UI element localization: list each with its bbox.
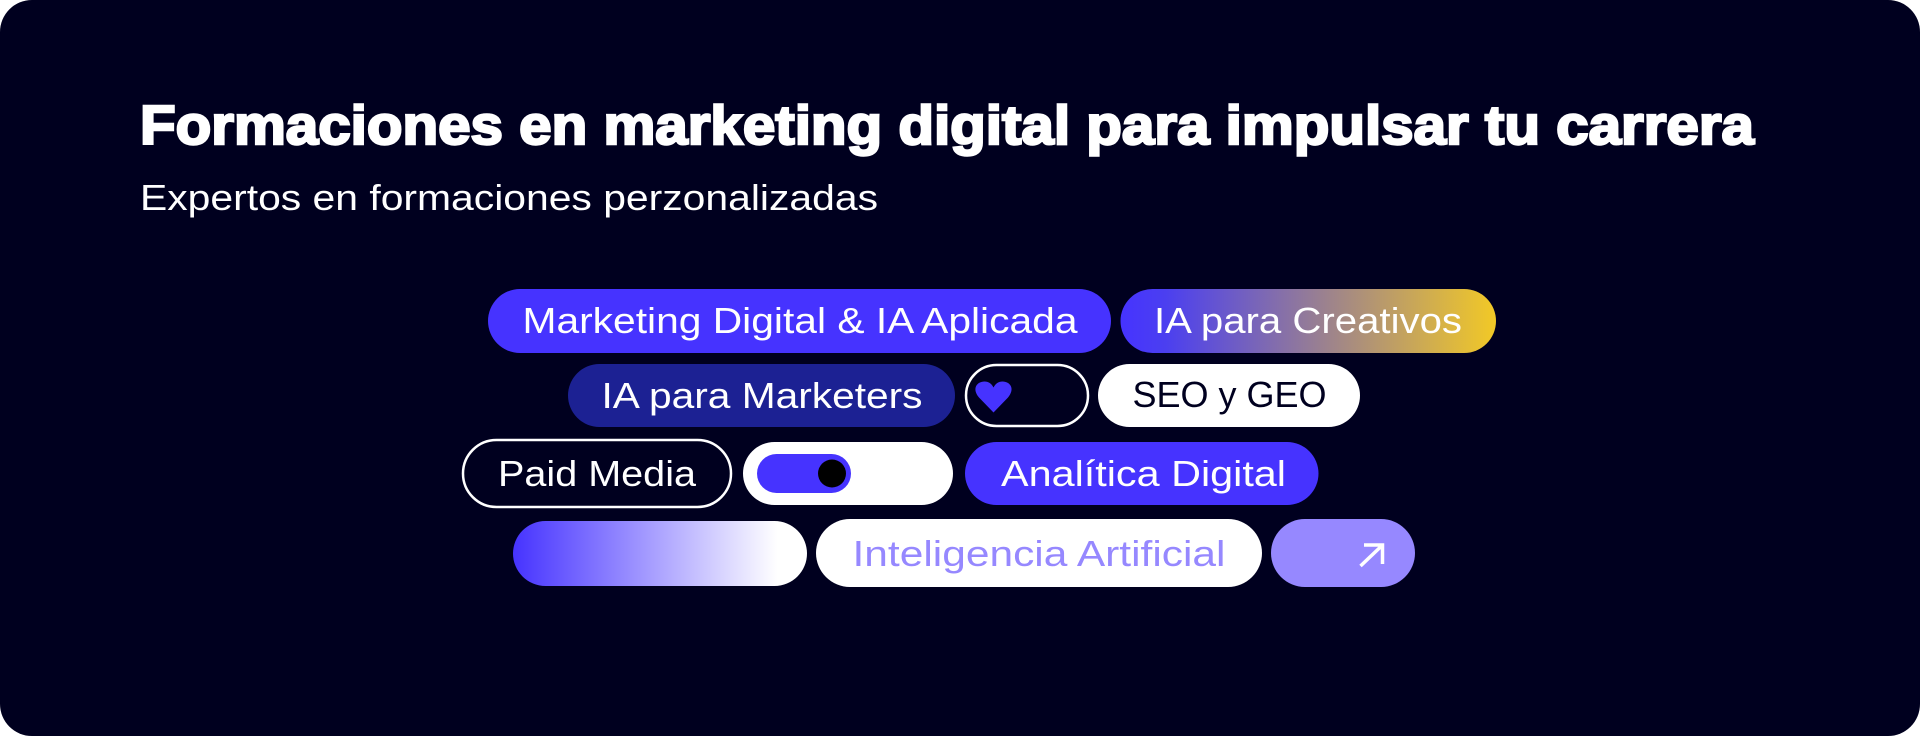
- pill: IA para Creativos: [1120, 289, 1496, 353]
- pill: Analítica Digital: Analítica Digital: [1001, 453, 1286, 494]
- pill: IA para Marketers: [568, 364, 955, 427]
- pill: Analítica Digital: [965, 442, 1318, 505]
- pill: gradient blue to white: [513, 521, 807, 586]
- pill: SEO y GEO: [1098, 364, 1360, 427]
- pill: Paid Media: Paid Media: [498, 453, 697, 494]
- toggle knob: [818, 460, 846, 488]
- pill: IA para Marketers: IA para Marketers: [602, 375, 922, 416]
- subtitle: Expertos en formaciones perzonalizadas: [140, 177, 878, 218]
- icon: heart: [975, 382, 1012, 412]
- pill: toggle switch: [743, 442, 953, 505]
- pill: SEO y GEO: SEO y GEO: [1132, 374, 1326, 415]
- title: Formaciones en marketing digital para impulsar tu carrera: [140, 94, 1754, 156]
- pill: heart outline: [966, 365, 1088, 426]
- pill: Inteligencia Artificial: Inteligencia Artificial: [852, 533, 1226, 574]
- pill: Paid Media: [463, 440, 731, 507]
- toggle track: [757, 454, 851, 493]
- pill: Inteligencia Artificial: [816, 519, 1262, 587]
- pill: IA para Creativos: IA para Creativos: [1154, 300, 1462, 341]
- pill: Marketing Digital & IA Aplicada: Marketing Digital & IA Aplicada: [522, 300, 1079, 341]
- icon: arrow: [1360, 545, 1382, 566]
- pill: Marketing Digital & IA Aplicada: [488, 289, 1111, 353]
- pill: arrow button: [1271, 519, 1415, 587]
